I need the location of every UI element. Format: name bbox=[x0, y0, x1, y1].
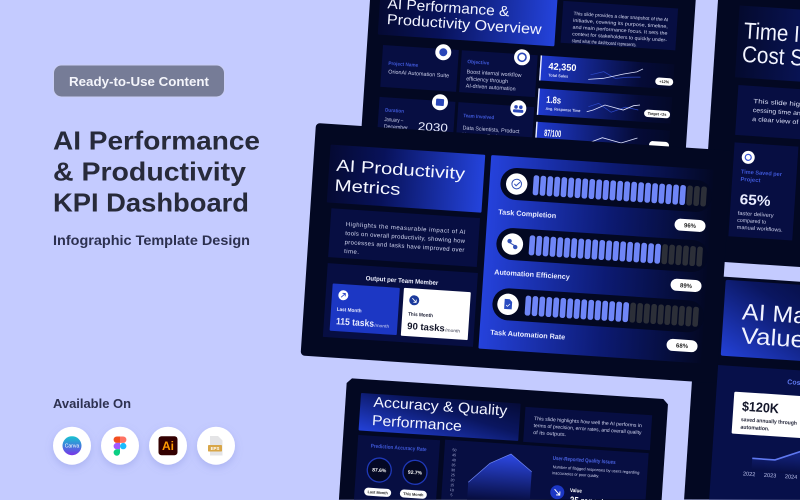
slide: time and cost savings bbox=[701, 0, 800, 271]
metrics description bbox=[328, 208, 480, 267]
card: duration bbox=[376, 90, 456, 152]
accuracy title panel: Accuracy & Quality bbox=[373, 395, 509, 420]
panel: quality issues chart bbox=[441, 440, 649, 500]
overview description: This slide provides a clear snapshot of the AI bbox=[573, 11, 669, 23]
overview title panel: Productivity Overview bbox=[386, 12, 543, 38]
card: this month: 90 tasks bbox=[407, 321, 445, 334]
meter: task automation rate bbox=[490, 287, 705, 353]
KPI strip: score bbox=[535, 122, 670, 158]
metrics description: Highlights the measurable impact of AI bbox=[346, 222, 466, 236]
value title panel: Value bbox=[740, 322, 800, 353]
card: this month bbox=[401, 288, 471, 340]
icon: stopwatch bbox=[741, 150, 755, 164]
overview description: initiative, covering its purpose, timeline, bbox=[573, 18, 668, 30]
y axis labels: 45 bbox=[452, 453, 456, 457]
panel: quality issues chart: User-Reported Quality Issues bbox=[552, 456, 616, 466]
icon: down arrow bbox=[550, 485, 565, 500]
gauge: this month bbox=[400, 459, 429, 499]
value chart panel bbox=[709, 365, 800, 500]
area chart bbox=[467, 451, 533, 500]
card: team involved: Managers, Engineers bbox=[462, 132, 509, 142]
gauge: this month: This Month bbox=[403, 492, 424, 497]
overview description bbox=[561, 1, 678, 51]
card: time saved: Time Saved per bbox=[741, 169, 783, 178]
icon: Figma bbox=[101, 427, 139, 465]
KPI strip: response time bbox=[537, 88, 672, 124]
card: time saved: faster delivery bbox=[737, 211, 774, 219]
card: time saved: compared to bbox=[737, 218, 766, 226]
overview description: stand what the dashboard represents. bbox=[572, 38, 637, 48]
slide: AI productivity metrics bbox=[301, 123, 732, 383]
card: duration: 2030 bbox=[417, 121, 448, 135]
callout: saved amount: automation. bbox=[740, 425, 770, 433]
card: team involved bbox=[455, 96, 535, 157]
badge: ready to use bbox=[54, 65, 224, 97]
metrics title panel bbox=[327, 145, 485, 213]
overview description: and main performance focus. It sets the bbox=[572, 25, 668, 37]
panel: prediction accuracy: Prediction Accuracy Rate bbox=[371, 444, 427, 453]
savings description bbox=[735, 85, 800, 143]
icon: EPS file bbox=[197, 427, 235, 465]
accuracy description: This slide highlights how well the AI performs in bbox=[534, 416, 642, 429]
metrics description: tools on overall productivity, showing how bbox=[345, 231, 466, 245]
card: duration: Duration bbox=[385, 108, 404, 115]
icon: Canva: Canva bbox=[65, 444, 79, 450]
card: team involved: Data Scientists, Product bbox=[462, 125, 520, 135]
gauge: this month: 92.7% bbox=[408, 470, 423, 477]
main title: KPI Dashboard bbox=[53, 188, 249, 218]
meter: task completion: Task Completion bbox=[498, 207, 556, 220]
KPI strip: score: 87/100 bbox=[544, 128, 561, 140]
panel: quality issues chart: Value bbox=[570, 488, 582, 495]
y axis labels: 50 bbox=[452, 448, 457, 452]
slide: AI market value bbox=[684, 275, 800, 500]
card: this month: /month bbox=[445, 328, 461, 334]
KPI strip: response time: Target <2s bbox=[648, 112, 667, 117]
card: duration: January – bbox=[384, 117, 404, 124]
value chart panel: 2023 bbox=[764, 473, 776, 480]
card: time saved: 65% bbox=[739, 192, 771, 210]
panel: output per team member bbox=[323, 263, 478, 347]
slide: accuracy and quality bbox=[339, 378, 668, 500]
icon: EPS file: EPS bbox=[211, 446, 219, 451]
accuracy description: of its outputs. bbox=[533, 430, 566, 438]
icon: Adobe Illustrator: Ai bbox=[162, 439, 174, 453]
KPI strip: total sales bbox=[539, 55, 674, 89]
y axis labels: 10 bbox=[450, 488, 454, 492]
meter: task completion: 96% bbox=[684, 223, 697, 230]
metrics description: processes and tasks have improved over bbox=[344, 240, 465, 254]
metrics title panel: Metrics bbox=[334, 177, 401, 199]
y axis labels: 35 bbox=[451, 463, 456, 467]
meter: task completion bbox=[498, 167, 713, 233]
y axis labels: 40 bbox=[452, 458, 456, 462]
gauge: last month: Last Month bbox=[367, 490, 389, 495]
card: objective: Objective bbox=[467, 59, 490, 67]
value chart panel: 2024 bbox=[785, 474, 797, 481]
card: time saved bbox=[728, 142, 798, 240]
callout: saved amount: saved annually through bbox=[741, 417, 797, 427]
card: project name: Project Name bbox=[388, 61, 419, 69]
savings title panel bbox=[735, 5, 800, 86]
main title bbox=[53, 126, 260, 218]
card: last month: 115 tasks bbox=[336, 316, 374, 330]
y axis labels: 20 bbox=[450, 478, 455, 482]
card: project name bbox=[380, 40, 459, 92]
subtitle: Infographic Template Design bbox=[53, 232, 250, 248]
meter: task automation rate: 68% bbox=[676, 343, 689, 350]
KPI strip: total sales: 42,350 bbox=[548, 61, 577, 74]
slide: AI Performance overview bbox=[357, 0, 698, 221]
panel: quality issues chart: Number of flagged responses by users regarding bbox=[553, 464, 640, 475]
value chart panel: 2022 bbox=[743, 471, 756, 478]
main title: AI Performance bbox=[53, 126, 260, 156]
area chart bbox=[751, 444, 800, 475]
card: last month: Last Month bbox=[336, 307, 362, 314]
y axis labels: 5 bbox=[450, 493, 453, 497]
y axis labels: 25 bbox=[451, 473, 455, 477]
accuracy description bbox=[523, 407, 652, 450]
card: team involved: Team Involved bbox=[463, 113, 494, 121]
card: objective: efficiency through bbox=[466, 76, 508, 85]
gauge: last month: 87.6% bbox=[372, 467, 387, 474]
y axis labels: 30 bbox=[451, 468, 455, 472]
card: duration: December bbox=[384, 124, 408, 132]
KPI strip: response time: Avg. Response Time bbox=[545, 106, 581, 113]
panel: output per team member: Output per Team Member bbox=[365, 275, 439, 287]
metrics title panel: AI Productivity bbox=[336, 157, 467, 183]
card: objective bbox=[459, 45, 538, 97]
card: objective: Boost internal workflow bbox=[466, 69, 522, 79]
card: time saved: manual workflows. bbox=[737, 225, 783, 234]
available on label: Available On bbox=[53, 396, 131, 411]
icon: Adobe Illustrator bbox=[149, 427, 187, 465]
meter: automation efficiency: 89% bbox=[680, 283, 693, 290]
accuracy title panel: Performance bbox=[371, 413, 462, 435]
meter: automation efficiency: Automation Efficiency bbox=[494, 267, 570, 281]
card: last month: /month bbox=[374, 323, 390, 329]
KPI strip: total sales: Total Sales bbox=[548, 72, 569, 79]
KPI strip: response time: 1.8s bbox=[546, 95, 561, 107]
icon: Canva bbox=[53, 427, 91, 465]
card: time saved: Project bbox=[740, 177, 761, 184]
accuracy description: terms of precision, error rates, and overall quality bbox=[533, 423, 642, 436]
card: this month: This Month bbox=[408, 312, 433, 319]
y axis labels bbox=[449, 448, 457, 497]
callout: saved amount bbox=[732, 392, 800, 440]
value title panel bbox=[721, 280, 800, 364]
card: last month bbox=[330, 283, 400, 335]
meter: task automation rate: Task Automation Rate bbox=[490, 328, 565, 342]
y axis labels: 15 bbox=[450, 483, 454, 487]
card: project name: OrionAI Automation Suite bbox=[388, 69, 449, 79]
accuracy title panel bbox=[359, 393, 521, 441]
overview description: context for stakeholders to quickly under- bbox=[572, 31, 668, 44]
panel: KPI meters bbox=[478, 155, 714, 363]
panel: prediction accuracy bbox=[354, 435, 440, 500]
callout: saved amount: $120K bbox=[741, 399, 780, 416]
KPI strip: total sales: +12% bbox=[659, 80, 670, 84]
gauge: last month bbox=[364, 457, 393, 497]
metrics description: time. bbox=[344, 249, 360, 256]
meter: automation efficiency bbox=[494, 227, 709, 293]
badge: ready to use: Ready-to-Use Content bbox=[69, 74, 210, 89]
card: objective: AI-driven automation bbox=[465, 83, 516, 93]
main title: & Productivity bbox=[53, 156, 247, 186]
panel: quality issues chart: inaccuracies or poor quality. bbox=[552, 470, 599, 478]
overview title panel bbox=[378, 0, 559, 46]
